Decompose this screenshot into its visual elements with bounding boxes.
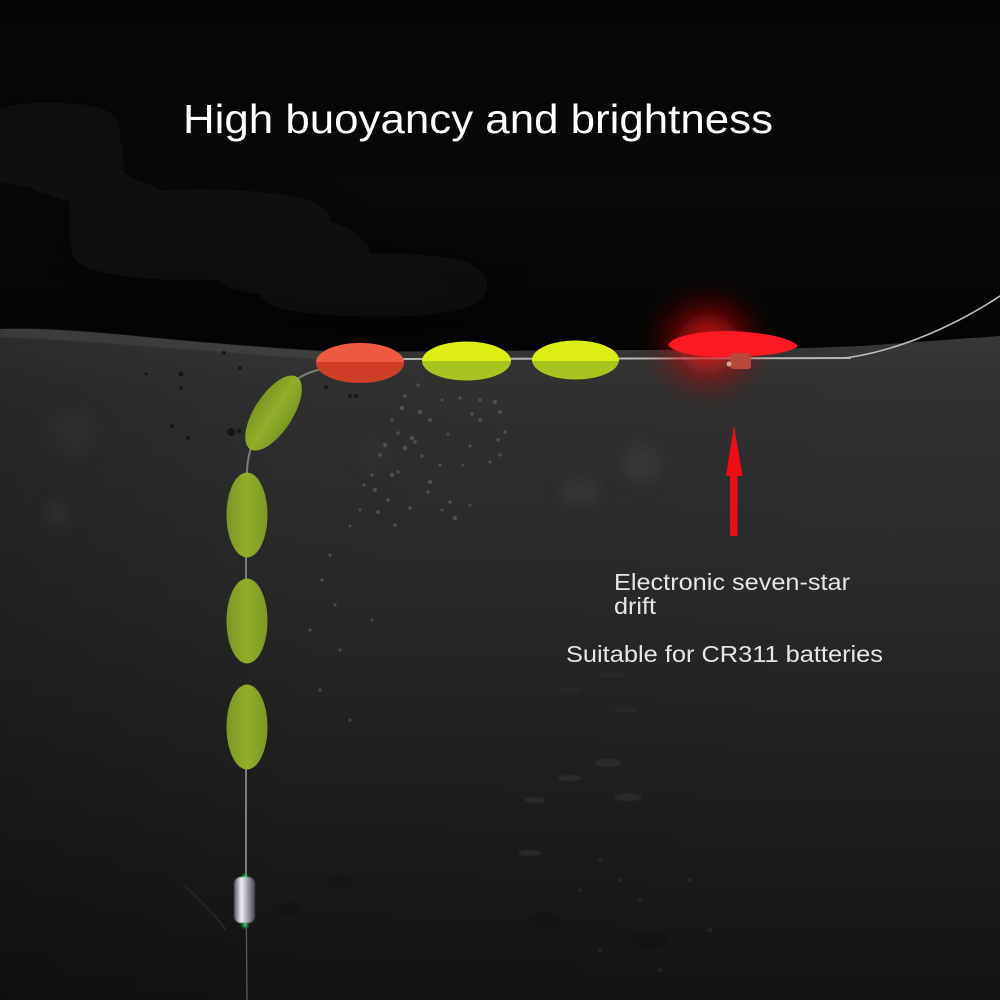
dark debris specks bbox=[144, 351, 358, 440]
sinker with green beads bbox=[184, 872, 255, 930]
fishing line bbox=[246, 296, 1000, 1000]
caption: product name bbox=[614, 569, 850, 619]
electronic seven-star drift float with red glow bbox=[642, 282, 798, 406]
red float bbox=[316, 343, 404, 383]
dark seabed patches bbox=[278, 876, 668, 949]
submerged green float 3 bbox=[226, 578, 268, 664]
caption: product name: Electronic seven-star bbox=[614, 569, 850, 595]
submerged green float 4 bbox=[226, 684, 268, 770]
yellow-green surface float 1 bbox=[422, 342, 511, 380]
yellow-green surface float 2 bbox=[532, 340, 619, 380]
rising bubbles bbox=[308, 384, 507, 721]
red arrow pointing to the drift float bbox=[726, 425, 742, 536]
night sky background bbox=[0, 0, 1000, 360]
submerged green float 2 bbox=[226, 472, 268, 558]
submerged green float: tilted bbox=[234, 367, 313, 459]
caption: battery note: Suitable for CR311 batteries bbox=[566, 641, 883, 667]
rocky seabed texture bbox=[518, 672, 712, 972]
caption: product name: drift bbox=[614, 593, 657, 619]
faint underwater blobs bbox=[46, 408, 661, 525]
water body bbox=[0, 329, 1000, 1000]
title: High buoyancy and brightness bbox=[183, 96, 773, 142]
